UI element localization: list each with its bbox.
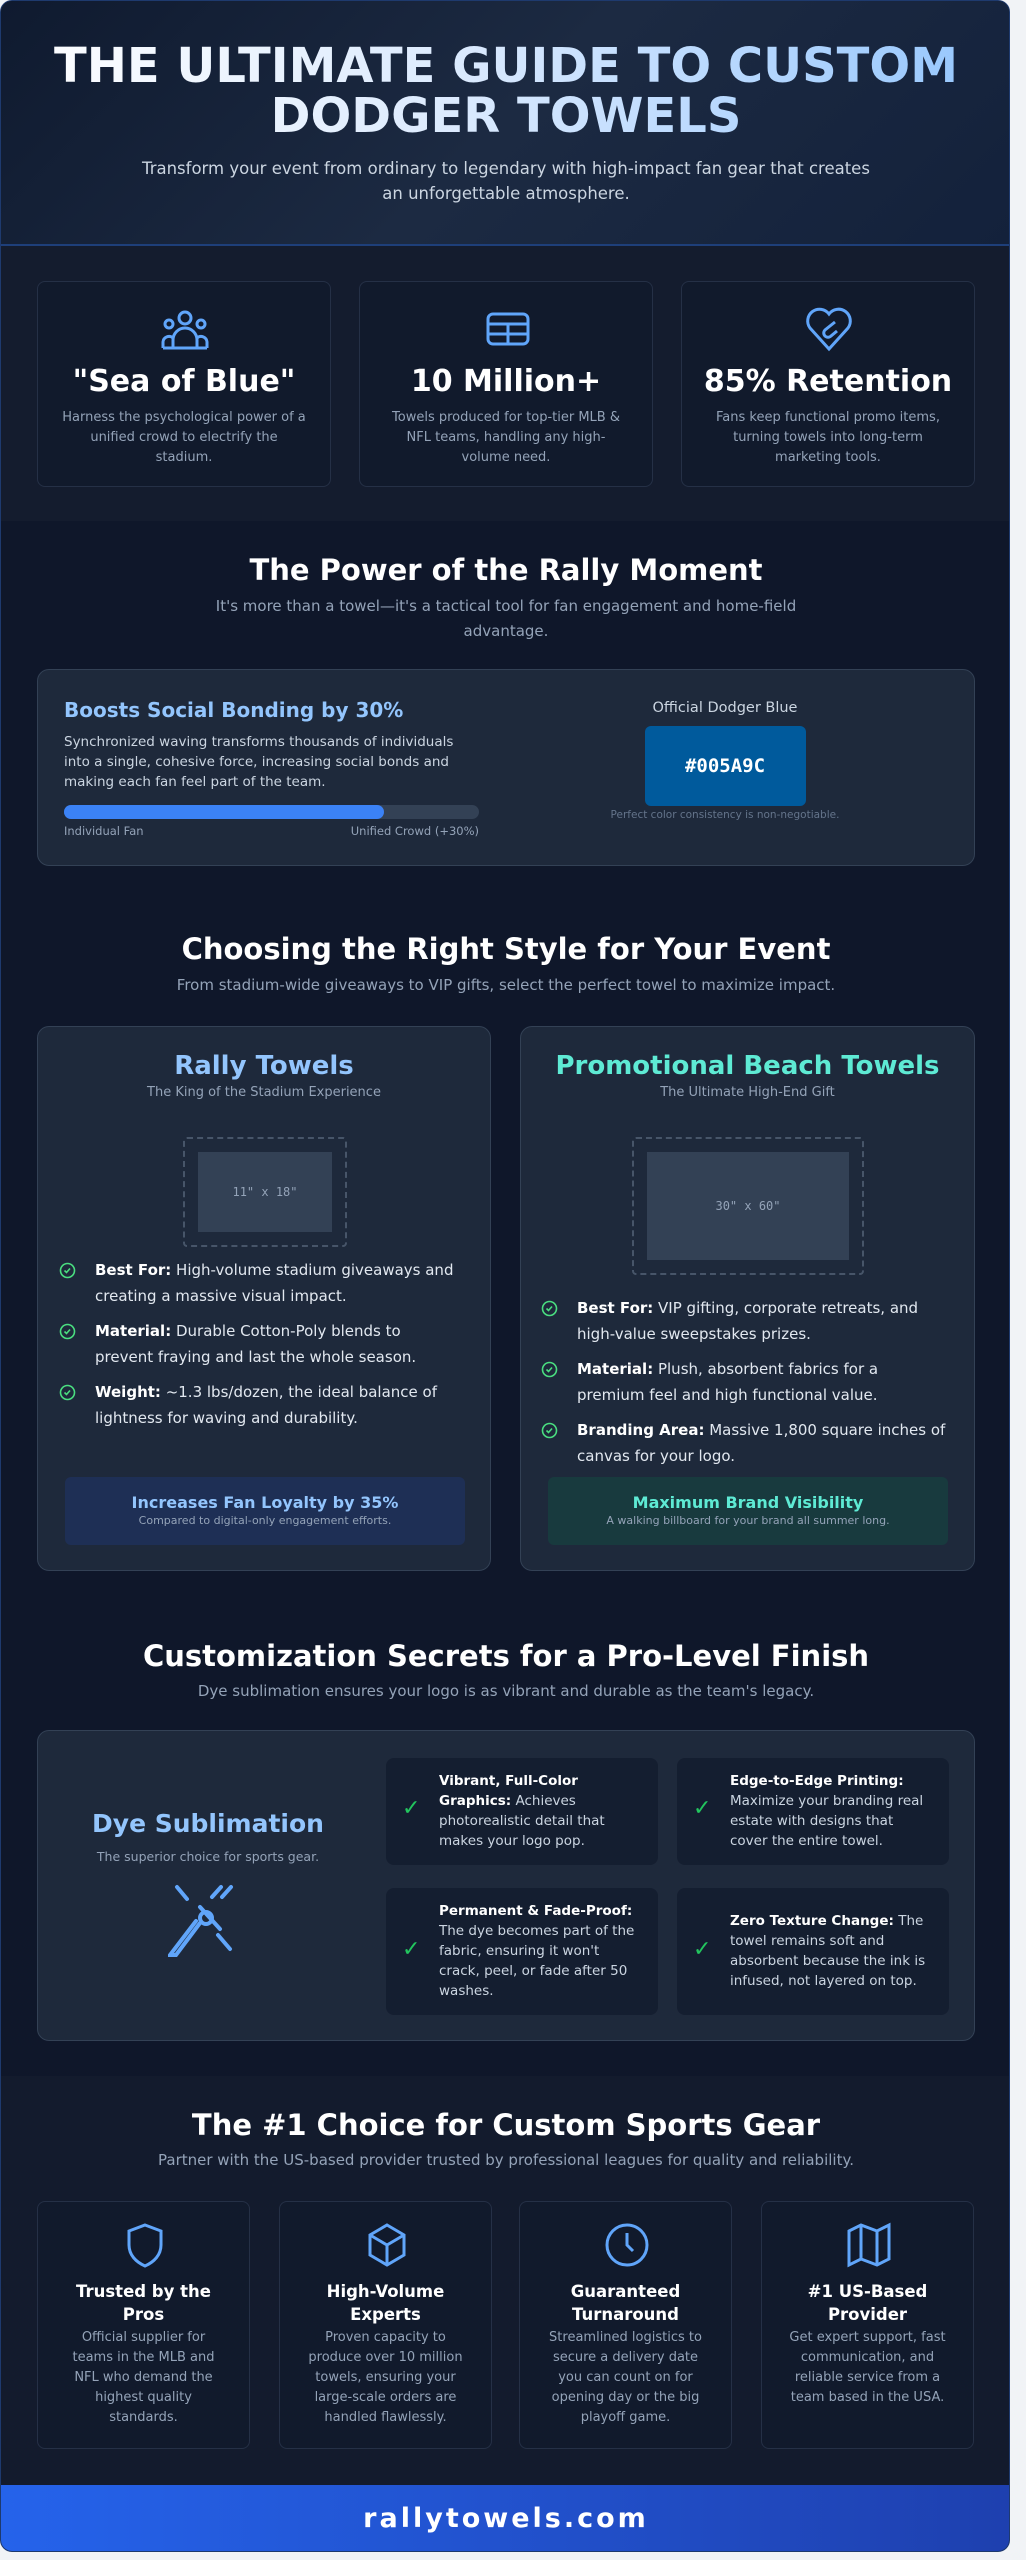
panel: rally towels [37,1026,491,1571]
subtitle: Transform your event from ordinary to legendary with high-impact fan gear that creates an unforgettable atmosphere. [142,159,870,203]
card: high-volume [279,2201,492,2449]
footer: rallytowels.com [363,2503,649,2534]
icon: shield [128,2223,162,2268]
panel: social bonding: Synchronized waving transforms thousands of individuals into a single, cohesive force, increasing social bonds and making each fan feel part of the team. [64,734,453,790]
card: trusted: Trusted by the Pros [76,2282,211,2324]
card: US-based [761,2201,974,2449]
card: turnaround: Streamlined logistics to secure a delivery date you can count on for opening day or the big playoff game. [549,2330,702,2425]
stat card: retention: Fans keep functional promo items, turning towels into long-term marketing tools. [716,410,940,465]
panel: beach towels: Promotional Beach Towels [555,1051,940,1081]
panel: rally towels: Rally Towels [174,1051,354,1081]
icon: spray brush [168,1884,234,1957]
panel: beach towels: Best For: VIP gifting, corporate retreats, and high-value sweepstakes prizes. [577,1299,918,1343]
icon: clock [606,2224,648,2266]
callout: loyalty: Increases Fan Loyalty by 35% [132,1493,398,1512]
color swatch: Official Dodger Blue [652,700,797,716]
card: US-based: #1 US-Based Provider [808,2282,927,2324]
towel size diagram: 30" x 60" [715,1199,781,1213]
callout: visibility: A walking billboard for your brand all summer long. [606,1514,890,1527]
feature: zero texture: ✓ [693,1937,711,1962]
heading: The #1 Choice for Custom Sports Gear [192,2108,820,2142]
stat card: sea of blue [37,281,331,487]
title [1,41,1011,141]
towel size diagram: 11" x 18" [232,1185,298,1199]
towel size diagram [183,1137,347,1247]
heading: Choosing the Right Style for Your Event [182,932,830,966]
panel: social bonding: Unified Crowd (+30%) [351,824,479,838]
feature: permanent: ✓ [402,1937,420,1962]
heading: Customization Secrets for a Pro-Level Finish [143,1639,869,1673]
feature list [60,1261,453,1427]
stat card: retention: 85% Retention [704,364,952,399]
icon: map [848,2222,890,2268]
icon: towel stack [486,312,530,346]
card: US-based: Get expert support, fast communication, and reliable service from a team based in the USA. [789,2330,946,2405]
card: trusted: Official supplier for teams in the MLB and NFL who demand the highest quality standards. [72,2330,215,2425]
panel: beach towels: The Ultimate High-End Gift [660,1085,835,1100]
progress bar [64,805,479,819]
feature: zero texture [677,1888,949,2015]
panel: rally towels: The King of the Stadium Experience [147,1085,381,1100]
stat card: sea of blue: "Sea of Blue" [73,364,295,399]
subheading: It's more than a towel—it's a tactical tool for fan engagement and home‑field advantage. [216,597,796,640]
feature: edge-to-edge: Edge-to-Edge Printing: Maximize your branding real estate with designs that cover the entire towel. [730,1773,923,1849]
color swatch: #005A9C [685,755,765,777]
subheading: Dye sublimation ensures your logo is as vibrant and durable as the team's legacy. [198,1682,814,1700]
feature: edge-to-edge: ✓ [693,1796,711,1821]
feature: permanent: Permanent & Fade-Proof: The dye becomes part of the fabric, ensuring it won't crack, peel, or fade after 50 washes. [439,1903,634,1999]
stat card: retention [681,281,975,487]
panel: rally towels: Material: Durable Cotton-Poly blends to prevent fraying and last the whole season. [95,1322,416,1366]
feature: permanent [386,1888,658,2015]
feature list [542,1299,946,1465]
title: DODGER TOWELS [271,88,741,144]
panel: social bonding [37,669,975,866]
card: high-volume: High-Volume Experts [327,2282,444,2324]
section: customization [37,1639,975,2041]
panel: rally towels: Best For: High-volume stadium giveaways and creating a massive visual impact. [95,1261,453,1305]
panel: beach towels [520,1026,975,1571]
icon: heart [806,308,852,352]
feature: edge-to-edge [677,1758,949,1865]
panel: dye sublimation: Dye Sublimation [92,1809,324,1838]
card: trusted [37,2201,250,2449]
feature: vibrant [386,1758,658,1865]
stats section [1,246,1011,521]
section: choosing style [37,932,975,1571]
stat card: 10 million: Towels produced for top-tier MLB & NFL teams, handling any high-volume need. [392,410,620,465]
callout: loyalty: Compared to digital-only engagement efforts. [139,1514,391,1527]
callout: loyalty [65,1477,465,1545]
panel: beach towels: Branding Area: Massive 1,800 square inches of canvas for your logo. [577,1421,945,1465]
panel: dye sublimation: The superior choice for sports gear. [97,1849,319,1864]
footer [1,2485,1011,2553]
panel: beach towels: Material: Plush, absorbent fabrics for a premium feel and high functional value. [577,1360,878,1404]
panel: rally towels: Weight: ~1.3 lbs/dozen, the ideal balance of lightness for waving and durability. [95,1383,437,1427]
card: turnaround [519,2201,732,2449]
stat card: 10 million [359,281,653,487]
feature: vibrant: ✓ [402,1796,420,1821]
header [1,1,1011,246]
feature: zero texture: Zero Texture Change: The towel remains soft and absorbent because the ink is infused, not layered on top. [730,1913,925,1989]
stat card: 10 million: 10 Million+ [411,364,601,399]
color swatch: Perfect color consistency is non-negotiable. [611,809,839,821]
callout: visibility [548,1477,948,1545]
card: high-volume: Proven capacity to produce over 10 million towels, ensuring your large-scale orders are handled flawlessly. [308,2330,463,2425]
card: turnaround: Guaranteed Turnaround [571,2282,680,2324]
section: rally moment [37,553,975,866]
icon: group [162,310,208,350]
feature: vibrant: Vibrant, Full-Color Graphics: Achieves photorealistic detail that makes your logo pop. [439,1773,605,1849]
subheading: Partner with the US-based provider trusted by professional leagues for quality and reliability. [158,2151,854,2169]
heading: The Power of the Rally Moment [249,553,763,587]
stat card: sea of blue: Harness the psychological power of a unified crowd to electrify the stadium. [62,410,306,465]
panel: social bonding: Boosts Social Bonding by 30% [64,698,403,722]
panel: social bonding: Individual Fan [64,824,144,838]
title: THE ULTIMATE GUIDE TO CUSTOM [54,38,958,94]
panel: dye sublimation [37,1730,975,2041]
section: #1 choice [1,2076,1011,2485]
towel size diagram [632,1137,864,1275]
callout: visibility: Maximum Brand Visibility [633,1493,863,1512]
subheading: From stadium-wide giveaways to VIP gifts, select the perfect towel to maximize impact. [177,976,835,994]
icon: box [368,2223,406,2267]
color swatch [611,700,839,821]
